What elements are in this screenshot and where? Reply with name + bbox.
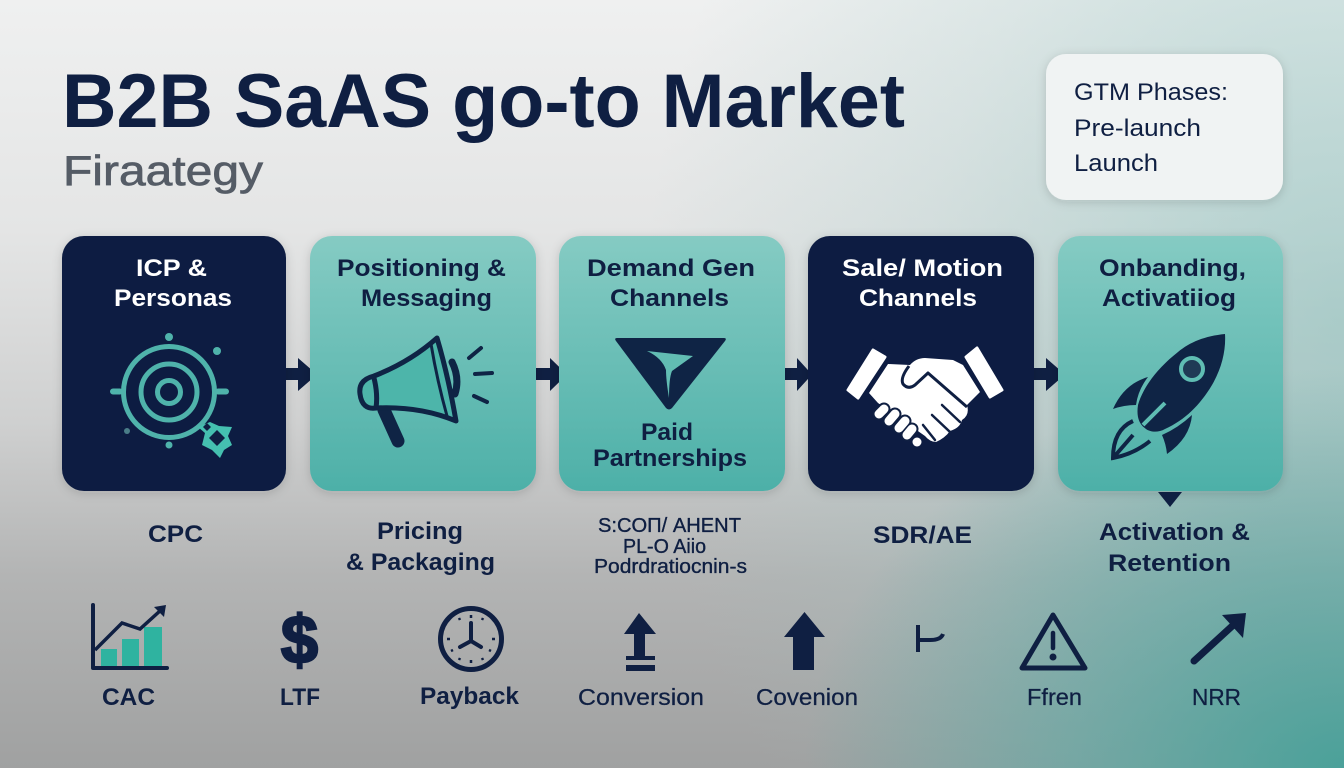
metric: NRR: NRR (1192, 684, 1241, 710)
label: CPC: CPC (148, 521, 203, 548)
metric: NRR (1192, 613, 1246, 710)
icon: target (113, 333, 232, 458)
metric: LTF: LTF (280, 684, 320, 711)
panel: ICP and personas: ICP & (136, 255, 207, 282)
icon: megaphone (360, 338, 492, 441)
icon: growth chart (93, 605, 167, 668)
label: activation and retention: Activation & (1099, 519, 1250, 546)
panel: GTM phases (1046, 54, 1283, 200)
metric: coversion (756, 612, 858, 710)
panel: positioning and messaging (310, 236, 536, 491)
icon: small glyph (918, 625, 943, 652)
panel: demand gen channels: Channels (610, 285, 729, 312)
label: garbled secondary text (594, 515, 747, 578)
label: pricing and packaging (346, 518, 495, 576)
metric: coversion: Covenion (756, 684, 858, 710)
arrow: step 4 to 5 (1034, 358, 1065, 391)
panel: GTM phases: Pre-launch (1074, 115, 1201, 142)
arrow: step 3 to 4 (785, 358, 812, 391)
metric: conversion: Conversion (578, 684, 704, 710)
panel: sales motion channels (808, 236, 1034, 491)
arrow: step 2 to 3 (536, 358, 567, 391)
panel: demand gen channels: Demand Gen (587, 255, 755, 282)
panel: ICP and personas (62, 236, 286, 491)
metric: warning: Ffren (1027, 684, 1082, 710)
panel: onboarding and activation (1058, 236, 1283, 491)
subtitle: Firaategy (63, 147, 263, 194)
panel: ICP and personas: Personas (114, 285, 232, 312)
arrow: down from step 5 (1158, 492, 1182, 507)
panel: demand gen channels: Partnerships (593, 445, 747, 472)
label: activation and retention: Retention (1108, 550, 1231, 577)
metric: warning (1022, 615, 1085, 710)
icon: clock (440, 608, 502, 670)
panel: positioning and messaging: Messaging (361, 285, 492, 312)
label: garbled secondary text: PL-O Aiio (623, 536, 706, 558)
panel: onboarding and activation: Onbanding, (1099, 255, 1246, 282)
icon: funnel triangle (615, 338, 726, 410)
panel: sales motion channels: Sale/ Motion (842, 255, 1003, 282)
panel: demand gen channels (559, 236, 785, 491)
label: pricing and packaging: & Packaging (346, 549, 495, 576)
arrow: step 1 to 2 (286, 358, 317, 391)
metric: LTF (280, 602, 320, 711)
metric: payback (420, 608, 520, 710)
panel: onboarding and activation: Activatiiog (1102, 285, 1236, 312)
label: garbled secondary text: Podrdratiocnin-s (594, 556, 747, 578)
icon: handshake (848, 348, 1002, 446)
metric: LTF: $ (281, 602, 318, 678)
metric: conversion (578, 613, 704, 710)
panel: demand gen channels: Paid (641, 419, 693, 446)
panel: positioning and messaging: Positioning & (337, 255, 506, 282)
panel: GTM phases: GTM Phases: (1074, 79, 1228, 106)
title: B2B SaAS go-to Market (62, 59, 905, 144)
panel: sales motion channels: Channels (859, 285, 977, 312)
metric: CAC (93, 605, 167, 711)
label: activation and retention (1099, 519, 1250, 577)
label: garbled secondary text: S:COΠ/ AHENT (598, 515, 741, 537)
metric: CAC: CAC (102, 684, 155, 711)
label: SDR/AE: SDR/AE (873, 522, 972, 549)
panel: GTM phases: Launch (1074, 150, 1158, 177)
label: pricing and packaging: Pricing (377, 518, 463, 545)
metric: payback: Payback (420, 683, 520, 710)
icon: rocket (1113, 334, 1225, 458)
